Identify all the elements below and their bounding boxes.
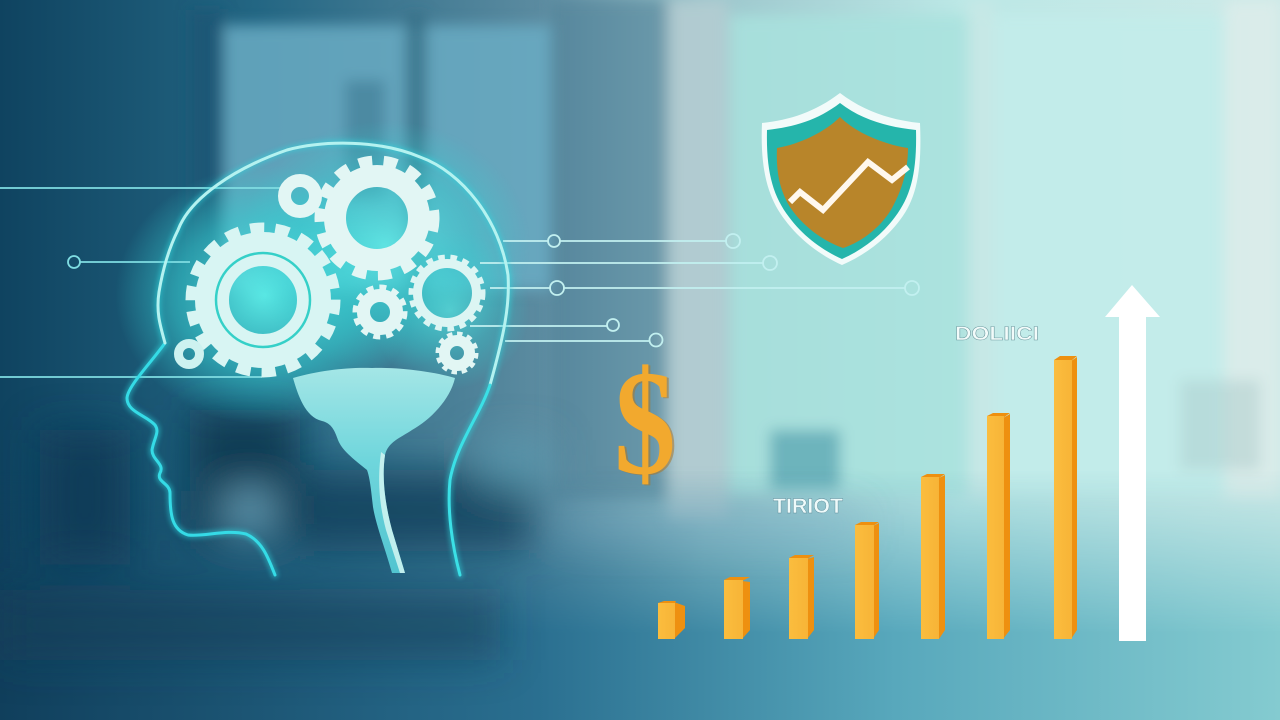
- connector lines: right side: [470, 234, 919, 346]
- brain stem and lower brain: [293, 368, 455, 573]
- bar 5: [921, 474, 945, 639]
- bar 2: [724, 577, 750, 639]
- gear: small top: [284, 180, 316, 212]
- chart label: upper: DOLIICI: [955, 324, 1039, 345]
- dollar sign icon: $: [616, 341, 678, 507]
- bar 4: [855, 522, 879, 639]
- gear: large top: [320, 161, 434, 275]
- dollar sign icon: $: [614, 340, 676, 506]
- gear: small lower right: [438, 334, 476, 372]
- connector lines: left side: [0, 188, 282, 377]
- gear: medium right: [412, 258, 482, 328]
- head outline: [127, 143, 508, 575]
- gear: large left: [191, 228, 335, 372]
- gear: small centre: [355, 287, 405, 337]
- upward white arrow: [1105, 285, 1160, 641]
- gear: tiny by forehead: [178, 344, 200, 364]
- chart label: lower: TIRIOT: [773, 495, 843, 518]
- shield icon with rising line: [762, 93, 920, 265]
- gears cluster: [178, 161, 482, 372]
- bar 7: [1054, 356, 1077, 639]
- bar 1: [658, 601, 685, 639]
- bar 3: [789, 555, 814, 639]
- glow behind the head: [115, 120, 530, 425]
- rising bar chart: [658, 356, 1077, 639]
- bar 6: [987, 413, 1010, 639]
